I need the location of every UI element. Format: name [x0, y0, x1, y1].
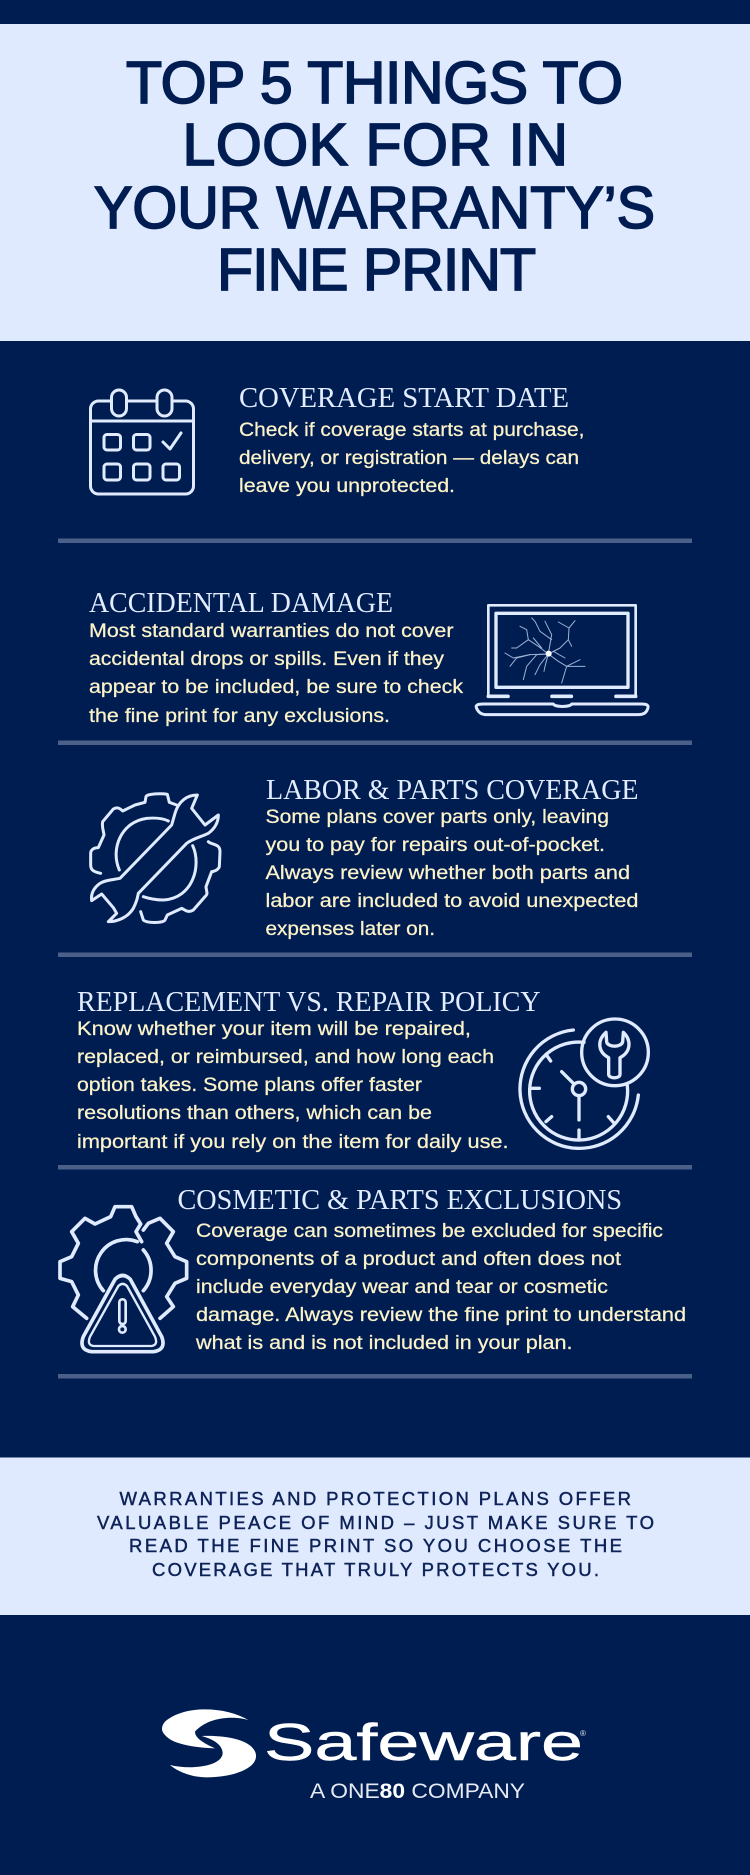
icon: Safeware swoosh	[162, 1709, 256, 1777]
title: LOOK FOR IN	[182, 112, 568, 178]
text: replacement vs repair policy: replaced, or reimbursed, and how long each	[77, 1046, 494, 1068]
text: labor and parts coverage: labor are included to avoid unexpected	[266, 890, 638, 912]
icon: calendar	[90, 390, 194, 494]
text: cosmetic and parts exclusions: what is and is not included in your plan.	[195, 1332, 572, 1354]
heading: coverage start date: COVERAGE START DATE	[239, 382, 569, 414]
text: coverage start date	[239, 419, 584, 497]
title panel	[0, 24, 750, 341]
registered mark: ®	[580, 1729, 586, 1738]
closing statement: WARRANTIES AND PROTECTION PLANS OFFER	[120, 1488, 631, 1509]
closing statement: VALUABLE PEACE OF MIND – JUST MAKE SURE TO	[97, 1512, 654, 1533]
heading: cosmetic and parts exclusions: COSMETIC & PARTS EXCLUSIONS	[178, 1184, 622, 1216]
text: replacement vs repair policy	[77, 1018, 508, 1153]
icon: cracked laptop	[476, 605, 648, 715]
closing statement: READ THE FINE PRINT SO YOU CHOOSE THE	[129, 1535, 622, 1556]
text: cosmetic and parts exclusions: Coverage can sometimes be excluded for specific	[196, 1220, 663, 1242]
logo: Safeware	[162, 1709, 586, 1803]
closing statement	[97, 1488, 654, 1580]
text: labor and parts coverage	[266, 806, 638, 940]
icon: gear with warning triangle	[60, 1207, 187, 1352]
text: accidental damage: appear to be included, be sure to check	[89, 676, 463, 698]
text: cosmetic and parts exclusions: components of a product and often does not	[196, 1248, 622, 1270]
closing statement: COVERAGE THAT TRULY PROTECTS YOU.	[152, 1559, 599, 1580]
text: labor and parts coverage: Some plans cover parts only, leaving	[266, 806, 609, 828]
wordmark: Safeware	[264, 1714, 583, 1772]
text: labor and parts coverage: Always review whether both parts and	[266, 862, 630, 884]
text: replacement vs repair policy: resolutions than others, which can be	[77, 1102, 432, 1124]
title: FINE PRINT	[217, 237, 536, 303]
text: labor and parts coverage: you to pay for repairs out-of-pocket.	[266, 834, 605, 856]
heading: labor and parts coverage: LABOR & PARTS COVERAGE	[266, 774, 638, 806]
text: cosmetic and parts exclusions: damage. Always review the fine print to understand	[196, 1304, 686, 1326]
icon: clock with wrench	[520, 1019, 648, 1148]
tagline: A ONE80 COMPANY	[310, 1779, 525, 1803]
title: TOP 5 THINGS TO	[126, 50, 623, 116]
text: accidental damage: accidental drops or spills. Even if they	[89, 648, 444, 670]
text: cosmetic and parts exclusions	[195, 1220, 686, 1354]
text: replacement vs repair policy: option takes. Some plans offer faster	[77, 1074, 423, 1096]
text: accidental damage: Most standard warranties do not cover	[89, 620, 454, 642]
text: coverage start date: leave you unprotected.	[239, 475, 455, 497]
title: YOUR WARRANTY’S	[94, 175, 655, 241]
text: labor and parts coverage: expenses later on.	[266, 918, 435, 940]
text: coverage start date: Check if coverage starts at purchase,	[239, 419, 584, 441]
text: replacement vs repair policy: important if you rely on the item for daily use.	[77, 1131, 508, 1153]
text: replacement vs repair policy: Know whether your item will be repaired,	[77, 1018, 471, 1040]
icon: gear and wrench	[91, 794, 220, 922]
text: cosmetic and parts exclusions: include everyday wear and tear or cosmetic	[196, 1276, 608, 1298]
heading: accidental damage: ACCIDENTAL DAMAGE	[89, 587, 393, 619]
closing panel	[0, 1458, 750, 1615]
text: accidental damage: the fine print for any exclusions.	[89, 705, 390, 727]
heading: replacement vs repair policy: REPLACEMENT VS. REPAIR POLICY	[77, 986, 541, 1018]
title	[94, 50, 655, 303]
text: accidental damage	[89, 620, 463, 727]
text: coverage start date: delivery, or registration — delays can	[239, 447, 579, 469]
